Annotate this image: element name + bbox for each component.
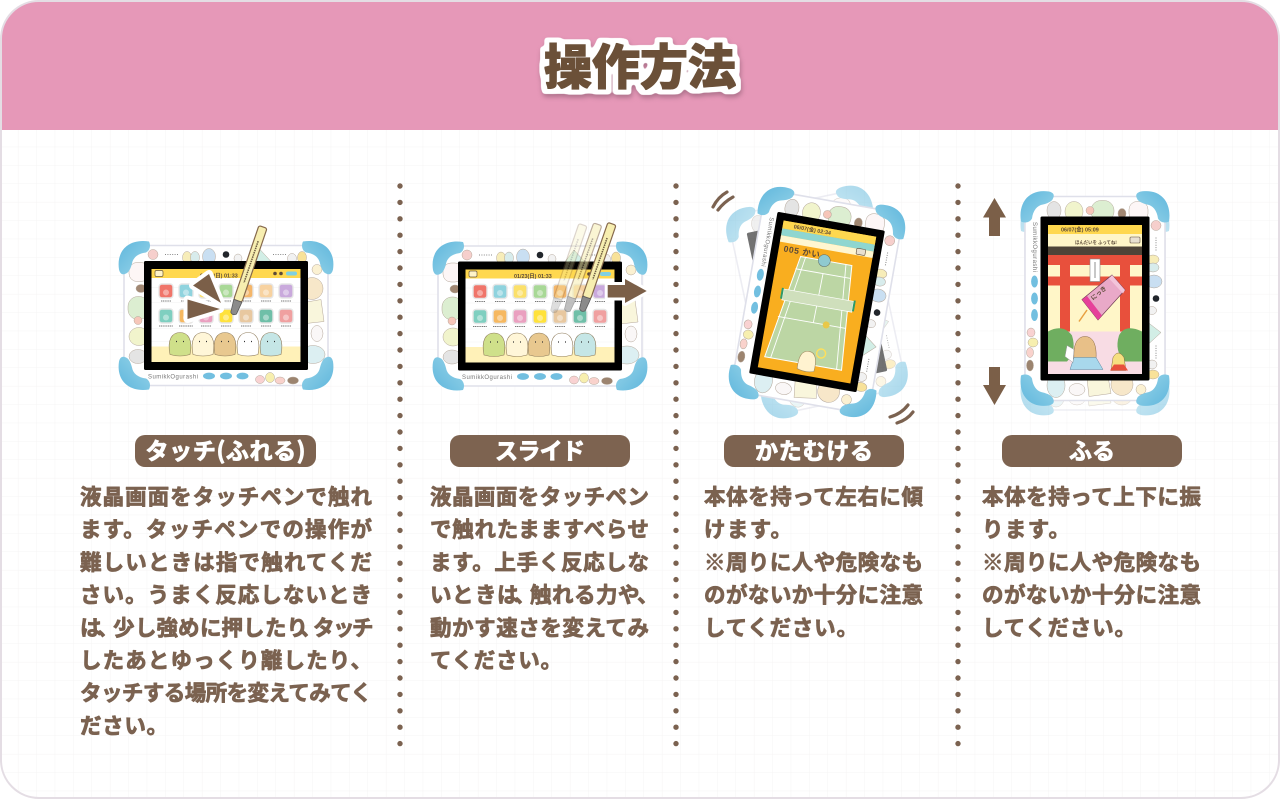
- omikuji game screen: [1048, 225, 1142, 374]
- text block: shake: [982, 480, 1201, 642]
- text block: shake: ※周りに人や危険なも: [982, 546, 1201, 577]
- text block: tilt: [704, 480, 923, 642]
- text block: tilt: けます。: [704, 513, 792, 544]
- text block: shake: 本体を持って上下に振: [982, 480, 1201, 512]
- illustration: tablet slide: SumikkOgurashi: [462, 375, 512, 381]
- text block: slide: いときは、触れる力や、: [430, 579, 659, 610]
- omikuji game screen: 06/07(金) 05:09: [1061, 226, 1099, 234]
- tennis game screen: 06/07(金) 02:34: [793, 222, 832, 237]
- label pill: slide: [450, 432, 630, 467]
- icon: touch marks: [188, 274, 221, 319]
- text block: tilt: ※周りに人や危険なも: [704, 546, 923, 577]
- icon: motion marks: [713, 192, 913, 423]
- text block: slide: ます。上手く反応しな: [430, 546, 649, 577]
- text block: touch: は、少し強めに押したり、タッチ: [80, 611, 374, 642]
- text block: touch: ます。タッチペンでの操作が: [80, 513, 372, 544]
- text block: slide: 動かす速さを変えてみ: [430, 611, 649, 642]
- tennis game screen: [758, 220, 876, 384]
- illustration: tablet touch: 01/23(日) 01:33: [200, 272, 238, 280]
- label pill: shake: [1002, 432, 1182, 467]
- text block: shake: してください。: [982, 611, 1136, 642]
- icon: slide arrow: [608, 279, 647, 303]
- text block: touch: 液晶画面をタッチペンで触れ: [80, 480, 372, 512]
- illustration: tablet tilt: SumikkOgurashi: [759, 217, 774, 267]
- text block: tilt: 本体を持って左右に傾: [704, 480, 923, 512]
- text block: touch: [80, 480, 374, 740]
- omikuji game screen: ほんだいを ふってね!: [1075, 239, 1117, 246]
- arrow: down: [983, 367, 1006, 405]
- tennis game screen: 005 かい: [783, 243, 821, 260]
- text block: touch: タッチする場所を変えてみてく: [80, 677, 372, 708]
- omikuji game screen: にっき: [1089, 284, 1108, 302]
- illustration: tablet slide: 01/23(日) 01:33: [514, 273, 552, 280]
- text block: touch: さい。うまく反応しないとき: [80, 579, 372, 610]
- label pill: shake: ふる: [1069, 432, 1115, 466]
- text block: slide: てください。: [430, 644, 562, 675]
- icon: stylus: [229, 226, 267, 316]
- text block: slide: 液晶画面をタッチペン: [430, 480, 649, 512]
- text block: touch: したあとゆっくり離したり、: [80, 644, 372, 675]
- label pill: tilt: かたむける: [755, 432, 873, 466]
- dotted divider 1: [397, 186, 403, 744]
- illustration: tablet slide: [433, 222, 647, 390]
- illustration: tablet touch: SumikkOgurashi: [148, 374, 198, 380]
- text block: tilt: してください。: [704, 611, 858, 642]
- header band: [0, 0, 1280, 130]
- icon: stylus motion: [549, 222, 616, 314]
- illustration: tablet shake: SumikkOgurashi: [1031, 222, 1037, 272]
- text block: shake: のがないか十分に注意: [982, 579, 1201, 610]
- arrow: up: [983, 198, 1006, 236]
- text block: shake: ります。: [982, 513, 1070, 544]
- title: 操作方法: [544, 28, 736, 98]
- label pill: tilt: [724, 432, 904, 467]
- dotted divider 3: [955, 186, 961, 744]
- text block: tilt: のがないか十分に注意: [704, 579, 923, 610]
- text block: touch: ださい。: [80, 709, 168, 740]
- text block: touch: 難しいときは指で触れてくだ: [80, 546, 372, 577]
- label pill: touch: タッチ(ふれる): [146, 432, 306, 466]
- illustration: tablet shake: [983, 191, 1169, 415]
- illustration: tablet tilt: [713, 181, 913, 423]
- text block: slide: で触れたまますべらせ: [430, 513, 649, 544]
- label pill: slide: スライド: [495, 432, 585, 466]
- text block: slide: [430, 480, 659, 675]
- dotted divider 2: [673, 186, 679, 744]
- illustration: tablet touch: [119, 226, 333, 390]
